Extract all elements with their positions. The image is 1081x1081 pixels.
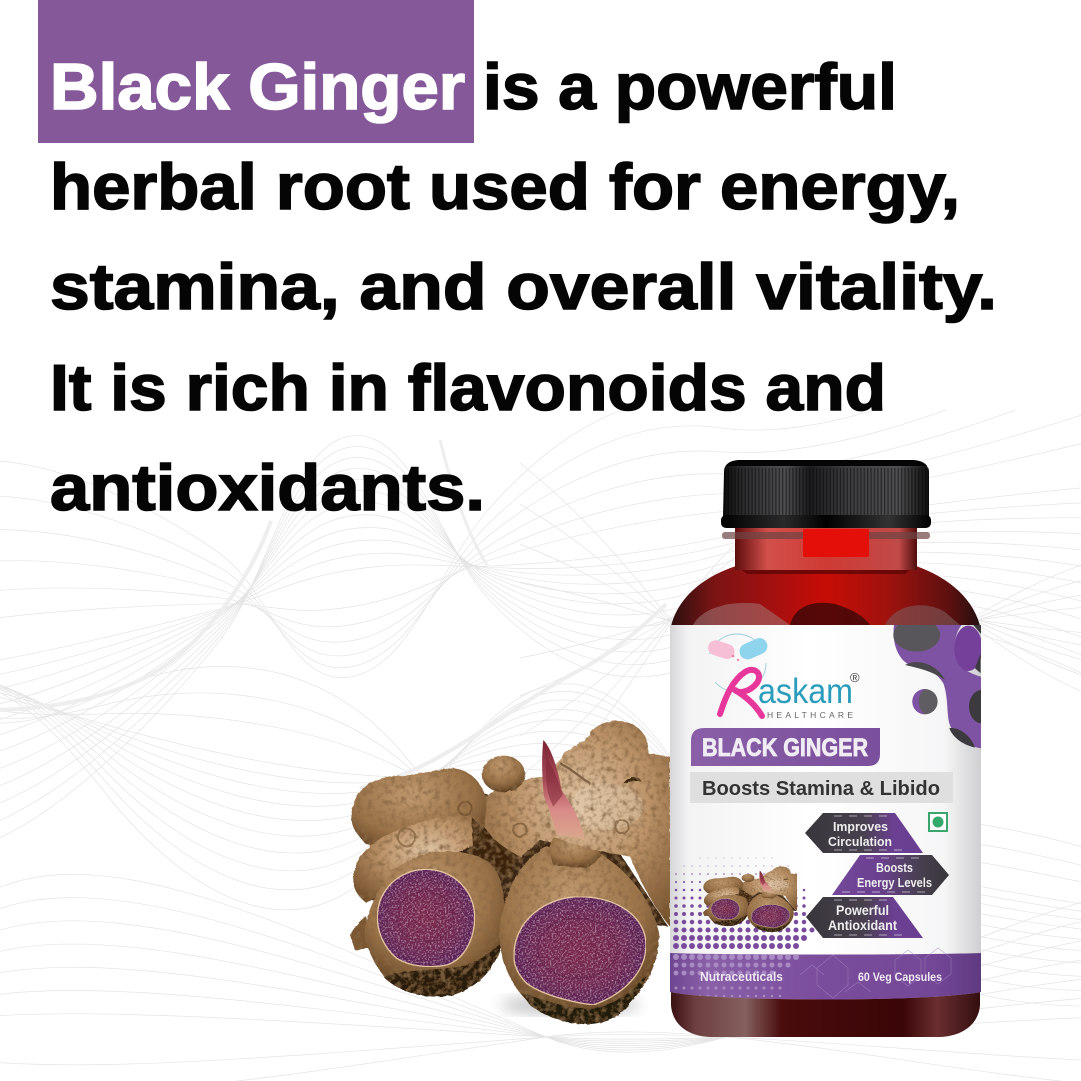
band hexagons xyxy=(800,948,951,998)
benefit arrow: improves circulation: Circulation xyxy=(828,835,892,849)
halftone dots xyxy=(676,858,815,946)
benefit arrow: improves circulation: Improves xyxy=(833,820,888,834)
benefit arrow: boosts energy levels xyxy=(832,855,949,895)
heading line 1: is a powerful xyxy=(483,50,897,123)
healthcare text: HEALTHCARE xyxy=(767,710,853,720)
benefit arrow: powerful antioxidant xyxy=(806,897,923,938)
highlighted words: Black Ginger xyxy=(50,50,465,123)
capsule reflections xyxy=(693,566,960,625)
benefit arrow: boosts energy levels: Boosts xyxy=(876,861,913,875)
logo capsules xyxy=(706,634,770,692)
label decoration xyxy=(893,625,981,748)
bottle neck xyxy=(735,528,917,570)
bottom purple band xyxy=(670,953,981,1000)
neck ring xyxy=(722,529,930,557)
benefit arrow: powerful antioxidant: Antioxidant xyxy=(828,917,897,933)
heading xyxy=(50,50,997,524)
bottle shoulder glass xyxy=(670,566,981,630)
band text right: 60 Veg Capsules xyxy=(858,970,942,984)
label bottom shading xyxy=(670,992,981,1000)
veg mark xyxy=(929,813,947,831)
heading line 3: stamina, and overall vitality. xyxy=(50,250,997,323)
band text left: Nutraceuticals xyxy=(700,969,783,984)
black ginger root photo xyxy=(350,721,670,1024)
wavy line background xyxy=(0,410,1081,1081)
logo wordmark: askam xyxy=(758,672,853,711)
benefit arrow: improves circulation xyxy=(805,813,923,853)
product label xyxy=(670,618,994,1005)
benefit strip text: Boosts Stamina & Libido xyxy=(702,778,940,800)
black cap xyxy=(721,460,931,528)
heading line 2: herbal root used for energy, xyxy=(50,150,960,223)
band dots xyxy=(676,957,800,996)
logo R mark xyxy=(720,670,762,716)
benefit strip xyxy=(690,772,953,803)
bottle base glass xyxy=(671,985,980,1037)
registered mark: ® xyxy=(850,670,860,685)
product name: BLACK GINGER xyxy=(702,734,868,762)
benefit arrow: boosts energy levels: Energy Levels xyxy=(857,876,932,890)
heading line 5: antioxidants. xyxy=(50,451,485,524)
raskam logo xyxy=(706,634,860,720)
mini ginger xyxy=(703,866,797,932)
heading highlight box xyxy=(38,0,474,143)
product name tag xyxy=(691,728,880,766)
benefit arrow: powerful antioxidant: Powerful xyxy=(836,902,889,918)
heading line 4: It is rich in flavonoids and xyxy=(50,351,886,424)
supplement bottle xyxy=(670,460,994,1037)
